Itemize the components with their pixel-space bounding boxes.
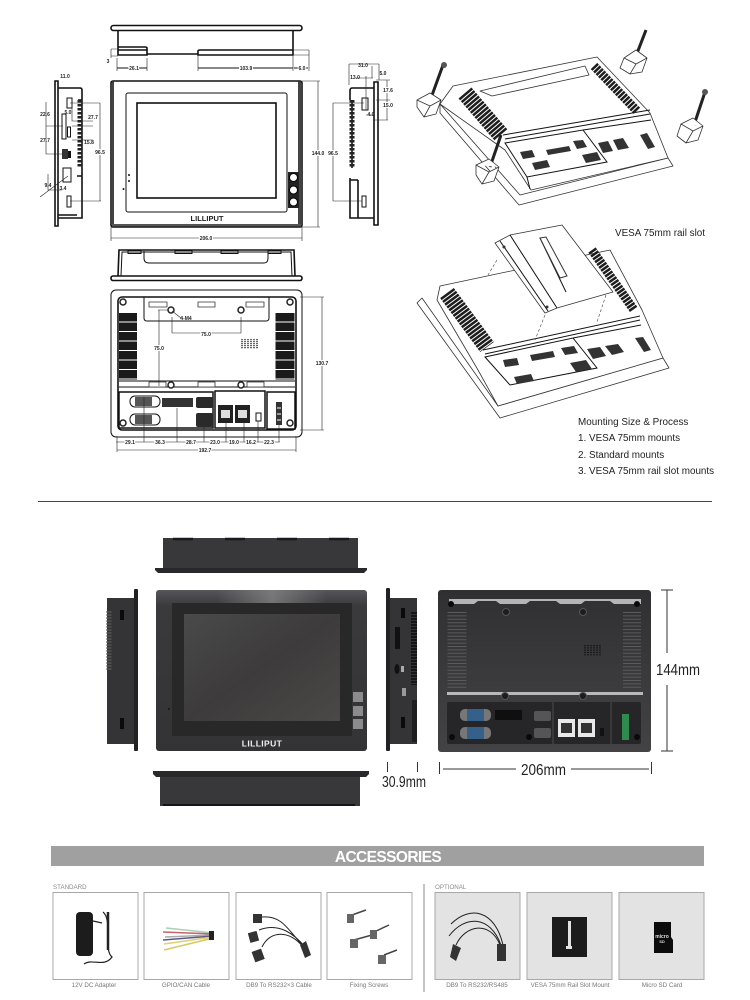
text block: mounting size and process: Mounting Size & Process xyxy=(578,417,688,428)
card: DB9 to RS232x3 cable: DB9 To RS232×3 Cable xyxy=(246,982,312,989)
connector ports xyxy=(503,337,651,384)
heatsink: photo right xyxy=(623,612,641,688)
dimension labels: top edge: 3 xyxy=(107,59,110,65)
dimension labels: left side: 96.5 xyxy=(95,150,105,156)
text block: mounting size and process xyxy=(578,417,714,477)
card: fixing screws xyxy=(327,892,412,989)
screw: top right xyxy=(620,30,647,74)
dimension labels: left side: 27.7 xyxy=(88,115,98,121)
dimension labels: left side: 22.6 xyxy=(40,112,50,118)
card: VESA 75mm rail slot mount xyxy=(527,892,612,989)
speaker grille xyxy=(585,645,600,656)
photo: right side of device xyxy=(386,588,417,751)
card: VESA 75mm rail slot mount: VESA 75mm Rail Slot Mount xyxy=(531,982,610,989)
dimension labels: right side: 96.5 xyxy=(328,151,338,157)
dimension labels: rear view: 75.0 xyxy=(154,346,164,352)
dimension labels: rear view: 28.7 xyxy=(186,440,196,446)
technical drawing: rear view xyxy=(111,290,328,454)
banner: accessories: ACCESSORIES xyxy=(335,849,441,866)
card: DB9 to RS232/RS485: DB9 To RS232/RS485 xyxy=(446,982,508,989)
rail slot bracket xyxy=(495,225,613,313)
dimension labels: rear view: 16.2 xyxy=(246,440,256,446)
photo: top edge of device xyxy=(155,538,367,573)
screw: left xyxy=(417,62,447,117)
text block: mounting size and process: 1. VESA 75mm mounts xyxy=(578,433,680,444)
dimension labels: rear view: 75.0 xyxy=(201,332,211,338)
card: micro SD card: Micro SD Card xyxy=(642,982,683,989)
card: DB9 to RS232x3 cable xyxy=(236,892,321,989)
card: 12V DC adapter xyxy=(53,892,138,989)
dimension labels: top edge: 6.0 xyxy=(299,66,306,72)
technical drawing: front view xyxy=(111,81,324,242)
dimension labels: rear view: 23.0 xyxy=(210,440,220,446)
isometric drawing: VESA rail slot mount xyxy=(417,225,669,418)
dimension labels: left side: 11.0 xyxy=(60,74,70,80)
logo: LILLIPUT: LILLIPUT xyxy=(242,738,283,748)
dimension labels: top edge: 26.1 xyxy=(129,66,139,72)
heatsink: left xyxy=(465,93,501,135)
dimension: depth 30.9mm xyxy=(382,762,426,791)
photo: left side of device xyxy=(107,589,138,751)
dimension labels: front view: 206.0 xyxy=(200,236,212,242)
card: micro SD card: micro xyxy=(655,934,669,940)
connector ports xyxy=(520,133,655,170)
dimension labels: top edge: 103.9 xyxy=(240,66,252,72)
dimension: width 206mm: 206mm xyxy=(521,762,566,779)
photo: device front xyxy=(156,590,367,751)
dimension labels: right side: 15.0 xyxy=(383,103,393,109)
banner: accessories xyxy=(51,846,704,866)
card: fixing screws: Fixing Screws xyxy=(350,982,388,989)
card: micro SD card: SD xyxy=(659,939,665,944)
dimension labels: left side xyxy=(40,74,105,192)
mount holes and corner screws xyxy=(120,299,293,426)
dimension labels: rear view: 22.3 xyxy=(264,440,274,446)
text block: mounting size and process: 3. VESA 75mm rail slot mounts xyxy=(578,466,714,477)
port panel xyxy=(447,702,641,744)
dimension labels: right side: 13.0 xyxy=(350,75,360,81)
dimension labels: front view: 144.0 xyxy=(312,151,324,157)
heading: optional: OPTIONAL xyxy=(435,884,467,891)
dimension labels: rear view: 36.3 xyxy=(155,440,165,446)
screw: front xyxy=(476,135,501,184)
dimension labels: left side: 9.4 xyxy=(45,183,52,189)
dimension labels: right side: 4.0 xyxy=(368,112,375,118)
dimension labels: right side xyxy=(328,63,393,157)
photo: device rear xyxy=(438,590,651,752)
dimension labels: top edge xyxy=(107,59,306,72)
text block: mounting size and process: 2. Standard mounts xyxy=(578,450,664,461)
heatsink: rear left xyxy=(119,313,137,380)
card: micro SD card xyxy=(619,892,704,989)
photo: bottom edge of device xyxy=(153,771,369,806)
dimension labels: rear view: 192.7 xyxy=(199,448,211,454)
dimension labels: front view xyxy=(200,151,324,242)
dimension labels: right side: 17.6 xyxy=(383,88,393,94)
card: GPIO/CAN cable: GPIO/CAN Cable xyxy=(162,982,211,989)
dimension labels: left side: 27.7 xyxy=(40,138,50,144)
dimension labels: right side: 5.0 xyxy=(380,71,387,77)
dimension labels: left side: 15.8 xyxy=(84,140,94,146)
dimension labels: rear view: 130.7 xyxy=(316,361,328,367)
dimension: depth 30.9mm: 30.9mm xyxy=(382,774,426,791)
dimension labels: rear view: 4-M4 xyxy=(180,316,192,322)
connector ports xyxy=(130,396,282,427)
dimension labels: left side: 3.4 xyxy=(60,186,67,192)
dimension labels: rear view: 29.1 xyxy=(125,440,135,446)
logo: LILLIPUT line drawing: LILLIPUT xyxy=(191,214,224,223)
heatsink: rear right xyxy=(276,313,294,380)
heatsink: right xyxy=(592,250,634,310)
dimension labels: right side: 31.0 xyxy=(358,63,368,69)
technical drawing: bottom edge view xyxy=(111,250,302,280)
isometric drawing: standard mount with four screws xyxy=(417,30,708,205)
heatsink: left xyxy=(447,293,487,347)
heatsink: photo left xyxy=(448,612,466,688)
technical drawing: right side view xyxy=(328,63,393,225)
dimension: height 144mm xyxy=(656,590,700,751)
port panel outlines xyxy=(119,391,295,429)
card: 12V DC adapter: 12V DC Adapter xyxy=(72,982,116,989)
card: GPIO/CAN cable xyxy=(144,892,229,989)
dimension: height 144mm: 144mm xyxy=(656,662,700,679)
heatsink: right xyxy=(594,66,637,111)
icon: front panel buttons xyxy=(288,172,299,208)
technical drawing: top edge view xyxy=(107,26,309,72)
dimension labels: rear view: 19.0 xyxy=(229,440,239,446)
dimension labels: left side: 5.0 xyxy=(65,110,72,116)
icon: front buttons xyxy=(353,692,363,729)
dimension labels: rear view xyxy=(125,316,328,454)
dimension: width 206mm xyxy=(440,762,652,779)
caption: VESA 75mm rail slot: VESA 75mm rail slot xyxy=(615,228,705,239)
heading: standard: STANDARD xyxy=(53,884,87,891)
screw: right xyxy=(677,89,708,143)
speaker grille xyxy=(242,339,257,349)
card: DB9 to RS232/RS485 xyxy=(435,892,520,989)
technical drawing: left side view xyxy=(40,74,105,226)
